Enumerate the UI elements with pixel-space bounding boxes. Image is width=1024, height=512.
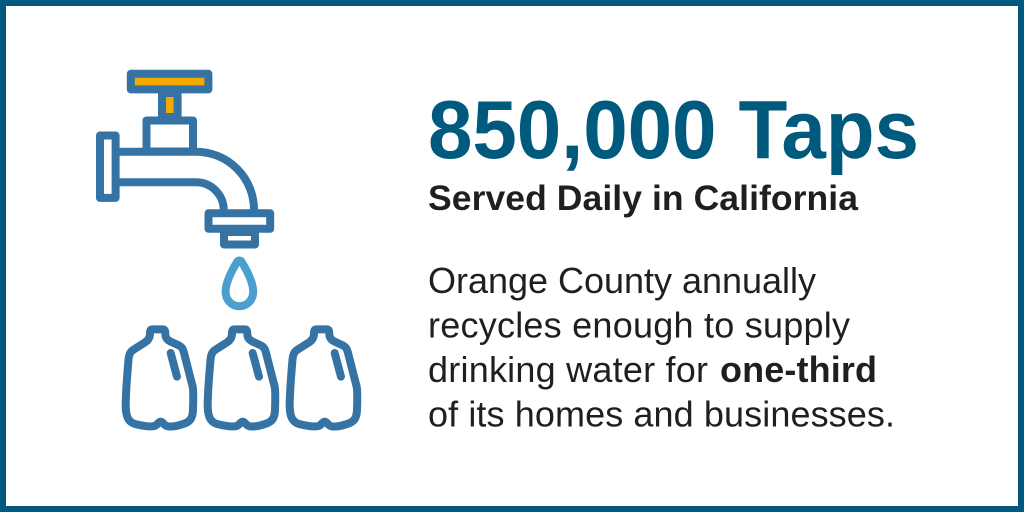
body line 3: drinking water for [428,349,708,390]
body line 4: of its homes and businesses. [428,394,895,434]
tap nozzle tip [224,232,255,244]
icon: water tap [100,74,270,244]
body line 1: Orange County annually [428,260,816,301]
title: 850,000 Taps [428,84,919,176]
icon: water drop [226,260,253,306]
jug 1 [126,329,193,426]
body line 2: recycles enough to supply [428,304,850,346]
tap spout pipe [116,152,254,213]
tap rear flange [100,136,116,198]
body text [428,260,895,434]
tap handle bar [131,74,208,89]
subtitle: Served Daily in California [428,178,858,218]
tap handle stem [162,93,178,117]
tap nozzle flange [208,213,270,229]
icon: three water jugs [126,329,357,426]
body line 3 emphasis: one-third [720,349,877,390]
jug 2 [208,329,275,426]
jug 3 [290,329,357,426]
tap valve body [146,120,193,152]
